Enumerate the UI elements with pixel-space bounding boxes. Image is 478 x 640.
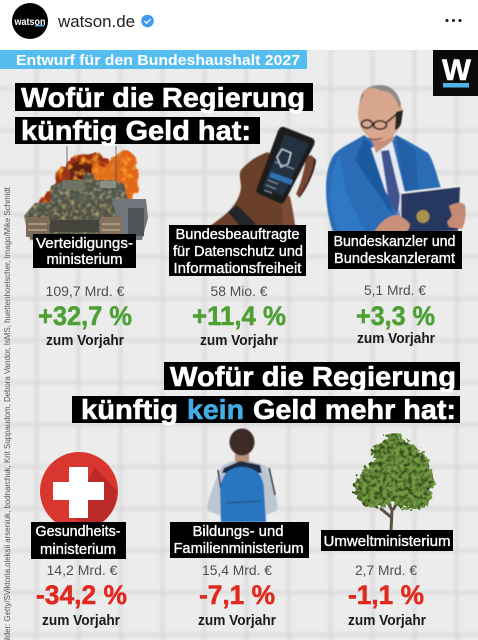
stat: Datenschutz: +11,4 %: [192, 301, 286, 331]
illustration: student with backpack: [207, 428, 278, 522]
torso and arms: [207, 461, 278, 522]
explosion: [38, 151, 138, 205]
shadow outline: [298, 155, 316, 198]
stat: Verteidigung: 109,7 Mrd. €: [46, 284, 125, 299]
turret: [24, 172, 128, 240]
phone: [256, 127, 315, 204]
icon: watson W logo: W: [442, 54, 472, 87]
hull rear: [112, 199, 148, 240]
stat: Gesundheit: [36, 563, 127, 629]
stat: Gesundheit: -34,2 %: [36, 580, 127, 610]
stat: Gesundheit: zum Vorjahr: [42, 613, 120, 629]
hand: [210, 152, 296, 226]
glasses: [362, 113, 398, 129]
label: Bundeskanzleramt: [328, 231, 462, 269]
stat: Bildung: 15,4 Mrd. €: [202, 563, 272, 578]
icon: more menu dots: [446, 19, 462, 22]
label: Verteidigungsministerium: [33, 234, 136, 268]
stat: Bildung: [198, 563, 276, 629]
label: Gesundheitsministerium: ministerium: [40, 542, 116, 558]
label: Gesundheitsministerium: Gesundheits-: [36, 524, 121, 540]
heading: Wofür die Regierung künftig kein Geld mehr hat: Wofür die Regierung: [170, 361, 456, 392]
trunk: [380, 494, 402, 531]
phone button: [269, 172, 293, 185]
illustration: chancellor with folder: [326, 85, 466, 232]
stat: Bildung: -7,1 %: [199, 580, 275, 610]
icon: watson W logo: [433, 50, 478, 96]
stat: Bildung: zum Vorjahr: [198, 613, 276, 629]
avatar: watson logo: watson: [14, 17, 45, 28]
neck: [368, 124, 394, 153]
post header: watson.de account: [12, 3, 462, 39]
stat: Kanzleramt: [356, 283, 435, 347]
credit line: Bilder: Getty/SViktoria,oleksii arseniuk, bodnarchuk, Krit Suppaudom, Debora Vandor, IsMS, huettenhoelscher, Imago/Mike Schmidt: [2, 186, 12, 640]
stat: Datenschutz: zum Vorjahr: [200, 333, 278, 349]
stat: Kanzleramt: zum Vorjahr: [357, 331, 435, 347]
stat: Verteidigung: +32,7 %: [38, 301, 132, 331]
stat: Datenschutz: [192, 284, 286, 349]
stat: Datenschutz: 58 Mio. €: [210, 284, 268, 299]
shoulders: [222, 461, 262, 473]
phone shield icon: [277, 149, 291, 167]
folder: [401, 186, 460, 232]
stat: Kanzleramt: +3,3 %: [356, 301, 435, 331]
backpack: [220, 467, 266, 522]
shirt: [371, 140, 405, 215]
label: Bundesbeauftragte: Bundesbeauftragte: [176, 227, 300, 243]
head: [230, 428, 254, 456]
neck: [235, 450, 249, 462]
hull: [24, 199, 127, 240]
icon: verified badge: [141, 15, 154, 27]
heading: Wofür die Regierung künftig Geld hat: künftig Geld hat:: [21, 115, 251, 146]
label: Verteidigungsministerium: ministerium: [46, 252, 122, 268]
hands: [374, 215, 410, 232]
folder emblem: [416, 210, 430, 223]
kicker: Entwurf für den Bundeshaushalt 2027: Entwurf für den Bundeshaushalt 2027: [16, 52, 300, 69]
label: Bildungs- und Familienministerium: Familienministerium: [174, 541, 304, 557]
heading: Wofür die Regierung künftig kein Geld mehr hat: kein: [187, 394, 244, 425]
label: Bundesbeauftragte: Informationsfreiheit: [174, 261, 302, 277]
stat: Gesundheit: 14,2 Mrd. €: [46, 563, 118, 578]
illustration: tree: [354, 434, 434, 531]
tie: [381, 150, 400, 214]
heading: Wofür die Regierung künftig Geld hat: [15, 82, 313, 146]
stat: Umwelt: [348, 563, 426, 629]
heading: Wofür die Regierung künftig Geld hat: Wofür die Regierung: [21, 82, 305, 113]
label: Verteidigungsministerium: Verteidigungs-: [36, 236, 133, 252]
track plates: [26, 217, 49, 237]
label: Bundeskanzleramt: Bundeskanzler und: [334, 234, 456, 250]
account name: watson.de: [57, 13, 135, 31]
stat: Umwelt: -1,1 %: [348, 580, 424, 610]
stat: Umwelt: 2,7 Mrd. €: [355, 563, 417, 578]
label: Bildungs- und Familienministerium: [170, 522, 309, 558]
watch strap: [228, 205, 256, 226]
heading: Wofür die Regierung künftig kein Geld mehr hat: [72, 361, 460, 425]
illustration: hand holding phone: [210, 127, 316, 226]
label: Bundesbeauftragte: für Datenschutz und: [173, 244, 303, 260]
stat: Verteidigung: zum Vorjahr: [46, 333, 124, 349]
icon: red circle with white cross: [40, 452, 118, 530]
heading: Wofür die Regierung künftig kein Geld mehr hat: Geld mehr hat:: [253, 394, 456, 425]
head: [358, 85, 402, 141]
crown: [354, 434, 434, 510]
label: Bundesbeauftragte: [169, 225, 306, 277]
antennas: [67, 146, 116, 180]
stat: Umwelt: zum Vorjahr: [348, 613, 426, 629]
label: Bundeskanzleramt: Bundeskanzleramt: [334, 251, 455, 267]
label: Gesundheitsministerium: [31, 522, 126, 559]
illustration: tank with explosion: [24, 146, 148, 240]
heading: Wofür die Regierung künftig kein Geld mehr hat: künftig: [81, 394, 178, 425]
stat: Verteidigung: [38, 284, 132, 349]
jacket: [326, 135, 446, 232]
label: Bildungs- und Familienministerium: Bildungs- und: [192, 524, 284, 540]
stat: Kanzleramt: 5,1 Mrd. €: [364, 283, 426, 298]
avatar: watson logo: [12, 3, 48, 39]
label: Umweltministerium: Umweltministerium: [324, 534, 450, 550]
